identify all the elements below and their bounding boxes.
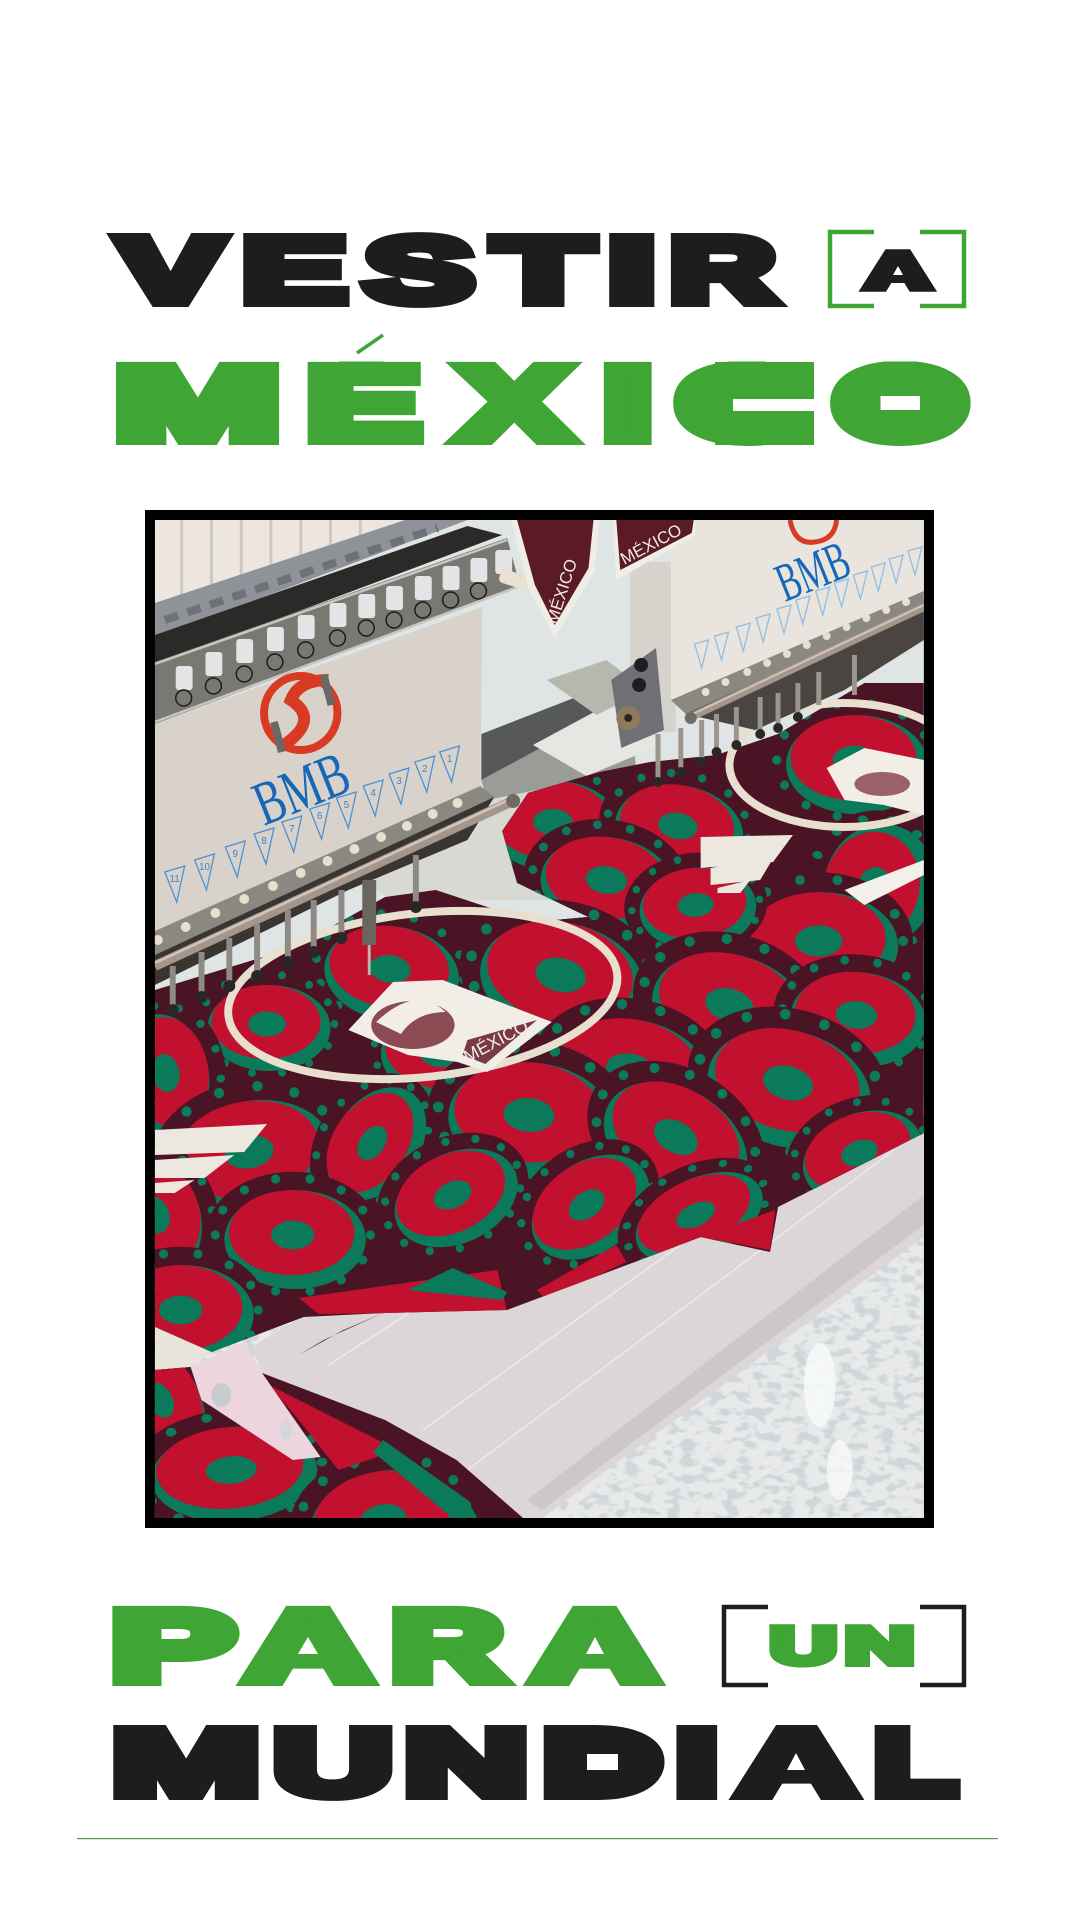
left machine: needles <box>167 855 422 1016</box>
right hoop <box>729 703 960 827</box>
title: MÉXICO: M <box>115 346 280 460</box>
crest patch left <box>348 980 552 1072</box>
numbered thread triangles right <box>695 547 922 668</box>
main fabric with scale pattern <box>155 683 924 1352</box>
numbered thread triangles left: 6 <box>317 811 323 822</box>
numbered thread triangles left: 11 <box>170 874 180 885</box>
title: MUNDIAL: N <box>404 1711 528 1815</box>
title: MUNDIAL: M <box>112 1711 260 1815</box>
numbered thread triangles left: 10 <box>199 862 210 873</box>
logo: BMB right: BMB <box>767 529 858 613</box>
title: MUNDIAL <box>112 1711 957 1815</box>
floor beside the machine <box>361 781 552 900</box>
title: PARA: A <box>533 1591 656 1701</box>
bottom rule <box>77 1838 998 1839</box>
left machine: spools <box>155 520 502 665</box>
white stripes on fabric <box>155 835 924 1193</box>
numbered thread triangles left: 2 <box>422 764 428 775</box>
title: VESTIR: S <box>365 219 474 321</box>
floor <box>155 1100 924 1518</box>
title: MÉXICO: O <box>834 346 967 460</box>
hanging crest patches: MÉXICO <box>543 557 581 626</box>
numbered thread triangles left: 3 <box>396 776 402 787</box>
right machine: column and mechanism <box>611 562 676 748</box>
logo: red swirl right <box>790 520 837 542</box>
bracketed word: UN: N <box>845 1617 914 1675</box>
numbered thread triangles left: 7 <box>289 824 295 835</box>
title: VESTIR: I <box>608 219 656 321</box>
title: MUNDIAL: D <box>542 1711 662 1815</box>
numbered thread triangles left: 9 <box>233 849 238 860</box>
pink tag <box>191 1342 321 1460</box>
numbered thread triangles left: 4 <box>370 788 376 799</box>
left hoop <box>224 906 622 1084</box>
title: MUNDIAL: A <box>738 1711 855 1815</box>
right machine: cream panel <box>671 520 924 700</box>
bracketed word: A <box>830 232 964 306</box>
title: PARA: A <box>246 1591 370 1701</box>
title: MÉXICO: X <box>460 346 569 460</box>
logo: BMB left: BMB <box>243 738 359 839</box>
hanging crest patches <box>511 520 696 637</box>
title: MUNDIAL: L <box>874 1711 957 1815</box>
title: VESTIR: E <box>242 219 346 321</box>
left machine: bead bar and rod <box>153 786 520 985</box>
lower left fabric <box>155 1367 523 1518</box>
numbered thread triangles left: 1 <box>447 754 453 765</box>
numbered thread triangles left <box>165 746 460 902</box>
title: MÉXICO: C <box>677 346 809 460</box>
photo: embroidery machines stitching the Mexico jersey <box>154 520 924 1518</box>
bracketed word: A: A <box>866 243 929 299</box>
logo: red swirl left <box>264 675 337 752</box>
title: MÉXICO: I <box>603 346 652 460</box>
numbered thread triangles left: 8 <box>261 836 267 847</box>
window strip and bench <box>481 660 661 800</box>
title: MUNDIAL: I <box>675 1711 718 1815</box>
title: MÉXICO <box>115 335 967 460</box>
numbered thread triangles left: 5 <box>344 800 350 811</box>
title: PARA: R <box>391 1591 504 1701</box>
photo frame <box>145 510 934 1528</box>
left corner of bench <box>155 1327 211 1370</box>
title: MUNDIAL: U <box>273 1711 393 1815</box>
left machine: cream panel <box>155 607 482 931</box>
crest patch right <box>827 748 924 815</box>
bracketed word: UN: U <box>770 1617 837 1675</box>
title: PARA: P <box>111 1591 235 1701</box>
title: VESTIR: R <box>670 219 776 321</box>
left machine: tension row <box>155 538 540 724</box>
title: PARA <box>111 1591 656 1701</box>
right machine: bead bar, rod and needles <box>653 591 924 787</box>
title: VESTIR <box>118 219 776 321</box>
white rail <box>252 1125 924 1518</box>
bracketed word: UN <box>724 1607 964 1685</box>
title: VESTIR: V <box>118 219 222 321</box>
title: MÉXICO: É <box>307 346 420 460</box>
hanging crest patches: MÉXICO <box>617 520 685 569</box>
title: VESTIR: T <box>494 219 592 321</box>
crest patch left: MÉXICO <box>460 1015 532 1067</box>
